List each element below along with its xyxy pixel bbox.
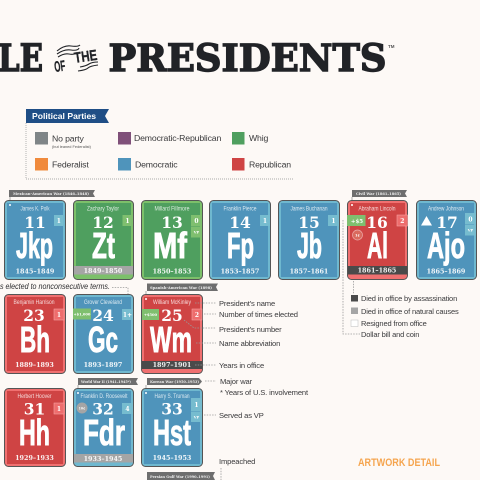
terms badge: 1 [57, 218, 61, 225]
annotation: major war: * Years of U.S. involvement [220, 388, 309, 397]
impeached icon [421, 216, 432, 226]
president name: Franklin D. Roosevelt [80, 393, 128, 400]
title: PRESIDENTS [108, 36, 386, 80]
war tag: spanish-american war [146, 284, 218, 298]
years: 1861–1865 [358, 266, 396, 274]
abbreviation: Al [367, 225, 388, 266]
abbreviation: Jb [297, 225, 322, 266]
died in office bar [74, 454, 133, 462]
war tag: civil war [352, 190, 407, 205]
card: Franklin Pierce [210, 200, 270, 280]
legend item: died by assassination: Died in office by assassination [361, 294, 457, 303]
years: 1853–1857 [221, 268, 259, 276]
war tag: persian gulf war [147, 472, 215, 480]
president name: Zachary Taylor [87, 206, 119, 212]
card: Harry S. Truman [142, 388, 202, 466]
legend item: federalist: Federalist [52, 160, 89, 170]
annotation: impeached: Impeached [219, 457, 255, 466]
abbreviation: Fp [227, 225, 254, 266]
legend item: democratic [118, 158, 178, 170]
vp badge: VP [467, 228, 474, 232]
legend item: republican [232, 158, 291, 170]
legend item: no party [35, 132, 92, 149]
years: 1889–1893 [15, 361, 54, 369]
legend item: whig [232, 132, 269, 144]
legend item: whig: Whig [249, 133, 269, 143]
terms badge: 1 [125, 218, 130, 225]
annotation: impeached [219, 457, 255, 480]
war tag: korean war: Korean War (1950–1953) [150, 379, 199, 384]
vp badge: VP [193, 230, 200, 234]
annotation: years in office: Years in office [219, 361, 264, 370]
panel: political parties legend [26, 109, 294, 179]
annotation: years in office [195, 361, 264, 370]
died in office bar [74, 266, 133, 274]
terms badge: 2 [195, 312, 199, 319]
legend item: democratic-republican [118, 132, 221, 144]
abbreviation: Zt [92, 225, 115, 266]
title connector: of the: OF [53, 58, 66, 76]
annotation: name abbreviation: Name abbreviation [219, 339, 280, 348]
card: Millard Fillmore [142, 200, 202, 280]
vp badge: VP [193, 416, 200, 420]
terms badge: 0 [194, 218, 199, 225]
terms badge: 1+ [123, 312, 132, 319]
years: 1929–1933 [15, 454, 54, 462]
coin: 1¢ [355, 234, 360, 238]
president number: 14 [229, 213, 251, 232]
legend heading banner [26, 109, 109, 123]
annotation: number of times elected: Number of times elected [219, 310, 298, 319]
president name: Benjamin Harrison [14, 299, 55, 306]
legend item: republican: Republican [249, 160, 291, 170]
card: Herbert Hoover [4, 388, 66, 466]
war tag: korean war [146, 378, 202, 393]
years: 1893–1897 [84, 361, 122, 369]
war tag: civil war: Civil War (1861–1865) [356, 191, 401, 196]
abbreviation: Bh [20, 319, 50, 360]
annotation: served as vp: Served as VP [219, 411, 264, 420]
legend item: resigned from office: Resigned from office [361, 319, 427, 328]
title connector: of the [53, 45, 98, 76]
president number: 25 [161, 306, 183, 325]
card: Zachary Taylor [74, 200, 134, 280]
president number: 23 [23, 306, 45, 325]
president number: 33 [161, 400, 183, 418]
abbreviation: Wm [150, 319, 192, 360]
president number: 16 [366, 213, 388, 232]
card: Grover Cleveland [73, 294, 134, 374]
years: 1857–1861 [290, 268, 328, 276]
right legend: deaths, resignation, currency [343, 220, 459, 339]
president number: 15 [298, 213, 320, 232]
war tag: mexican-american war [9, 190, 95, 206]
card: James K. Polk [4, 200, 66, 280]
abbreviation: Hst [153, 412, 191, 453]
dollar bill tag: +$5 [351, 219, 363, 225]
annotation: president's number [184, 320, 282, 334]
terms badge: 2 [400, 218, 404, 225]
president number: 31 [24, 400, 45, 418]
president number: 24 [92, 306, 114, 325]
annotation: president's name: President's name [219, 299, 275, 308]
footnote text: s elected to nonconsecutive terms. [0, 282, 110, 291]
legend item: federalist [35, 158, 89, 170]
annotation: president's number: President's number [219, 325, 282, 334]
coin: 10¢ [79, 406, 85, 410]
legend item: democratic-republican: Democratic-Republican [134, 133, 221, 143]
assassination bar [142, 361, 202, 369]
terms badge: 0 [468, 216, 473, 224]
legend item: democratic: Democratic [135, 160, 178, 170]
president name: Harry S. Truman [154, 393, 190, 400]
war tag: world war ii: World War II (1941–1945*) [80, 379, 131, 384]
title: TM [388, 44, 395, 49]
dollar bill tag: +$500 [144, 313, 158, 317]
years: 1845–1849 [16, 268, 55, 276]
president name: Herbert Hoover [18, 393, 52, 400]
terms badge: 1 [331, 218, 336, 225]
card: James Buchanan [278, 200, 340, 280]
card: Andrew Johnson [416, 200, 476, 280]
war tag: mexican-american war: Mexican-American War (1846–1848) [13, 191, 89, 196]
abbreviation: Fdr [83, 412, 125, 453]
abbreviation: Gc [88, 319, 118, 360]
dollar bill tag: +$1,000 [74, 312, 91, 316]
years: 1865–1869 [427, 268, 466, 276]
years: 1933–1945 [84, 455, 122, 463]
president name: James K. Polk [20, 206, 50, 212]
assassination bar [348, 266, 407, 274]
years: 1897–1901 [153, 361, 191, 369]
president number: 12 [92, 213, 114, 232]
president name: Abraham Lincoln [358, 206, 396, 212]
terms badge: 1 [57, 312, 61, 319]
abbreviation: Jkp [16, 225, 53, 266]
artwork detail label: ARTWORK DETAIL [358, 457, 440, 469]
card: Abraham Lincoln [347, 200, 408, 280]
president name: Grover Cleveland [84, 299, 122, 306]
president number: 17 [436, 213, 458, 232]
president number: 11 [24, 213, 46, 232]
president number: 32 [92, 400, 114, 418]
legend item: died of natural causes: Died in office of natural causes [361, 307, 459, 316]
terms badge: 1 [57, 406, 61, 413]
title connector: of the: THE [73, 47, 98, 67]
abbreviation: Mf [153, 225, 188, 266]
legend heading banner: Political Parties [32, 111, 96, 121]
war tag: persian gulf war: Persian Gulf War (1990–1991) [150, 474, 210, 479]
president number: 13 [161, 213, 183, 232]
legend item: no party: No party [52, 134, 84, 144]
card: Benjamin Harrison [4, 294, 66, 374]
war tag: world war ii [78, 378, 138, 393]
years: 1945–1953 [153, 454, 192, 462]
annotation: major war: Major war [220, 377, 253, 386]
president name: James Buchanan [290, 206, 328, 212]
annotation: major war [205, 377, 309, 397]
terms badge: 1 [263, 218, 267, 225]
president name: Millard Fillmore [154, 206, 190, 212]
terms badge: 4 [125, 406, 130, 413]
years: 1849–1850 [84, 267, 123, 275]
president name: William McKinley [153, 299, 192, 306]
president name: Franklin Pierce [224, 206, 257, 212]
legend item: dollar bill and coin: Dollar bill and coin [361, 330, 419, 339]
terms badge: 1 [194, 402, 199, 409]
card: William McKinley [142, 294, 202, 374]
abbreviation: Hh [19, 412, 50, 453]
years: 1850–1853 [153, 268, 192, 276]
legend item: no party: (but leaned Federalist) [52, 144, 92, 149]
card: Franklin D. Roosevelt [74, 388, 134, 466]
war tag: spanish-american war: Spanish-American War (1898) [150, 285, 212, 290]
president name: Andrew Johnson [428, 206, 464, 212]
